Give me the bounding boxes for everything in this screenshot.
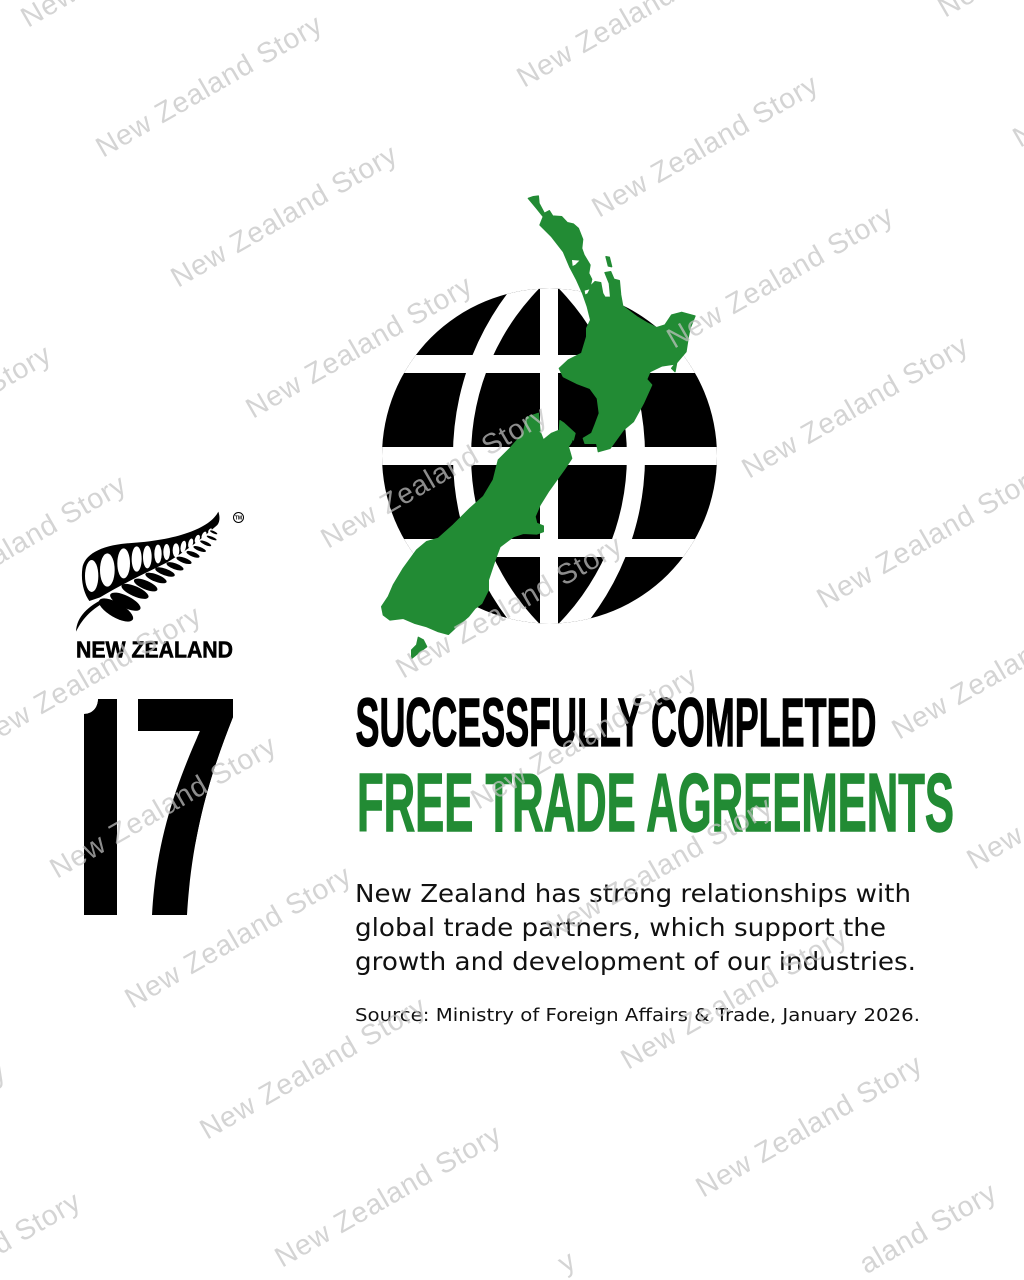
watermarks: New Zealand Story xyxy=(736,329,974,485)
watermarks: New Zealand Story xyxy=(270,1118,507,1274)
body text xyxy=(355,879,916,976)
logo: silver fern New Zealand xyxy=(76,512,243,662)
South Island xyxy=(382,413,575,658)
watermarks: New Zealand Story xyxy=(166,138,403,294)
watermarks: y xyxy=(552,1244,582,1280)
watermarks: aland Story xyxy=(854,1176,1002,1280)
watermarks: New Zealand Story xyxy=(390,529,628,685)
big number 17: 1 xyxy=(40,634,155,981)
watermarks: New Zealand Story xyxy=(120,859,357,1015)
icon: globe xyxy=(382,288,717,624)
map: New Zealand xyxy=(382,196,695,658)
North Island xyxy=(528,196,695,452)
watermarks: New Zealand Story xyxy=(240,269,478,425)
source note: Source: Ministry of Foreign Affairs & Trade, January 2026. xyxy=(355,1005,920,1026)
watermarks: New Zealand Story xyxy=(90,8,328,164)
watermarks: New Zealand Story xyxy=(466,660,703,816)
icon: trademark xyxy=(234,512,244,522)
watermarks: New Zealand Story xyxy=(316,399,553,555)
watermarks: New Zealand Story xyxy=(44,729,282,885)
watermarks: New Zealand Story xyxy=(616,920,853,1076)
body text: global trade partners, which support the xyxy=(355,913,886,942)
watermarks: New Zealand Story xyxy=(662,199,899,355)
body text: growth and development of our industries. xyxy=(355,947,916,976)
logo wordmark: NEW ZEALAND xyxy=(76,636,233,662)
big number 17: 7 xyxy=(122,634,247,981)
watermarks: New Zealand Story xyxy=(586,68,824,224)
icon: trademark: TM xyxy=(235,516,242,522)
watermarks: New Zealand Story xyxy=(194,990,432,1146)
icon: fern xyxy=(76,512,219,632)
body text: New Zealand has strong relationships with xyxy=(355,879,911,908)
watermarks: New Zealand Story xyxy=(540,790,778,946)
big number 17 xyxy=(84,699,233,915)
watermarks: New Zealand Story xyxy=(690,1048,928,1204)
